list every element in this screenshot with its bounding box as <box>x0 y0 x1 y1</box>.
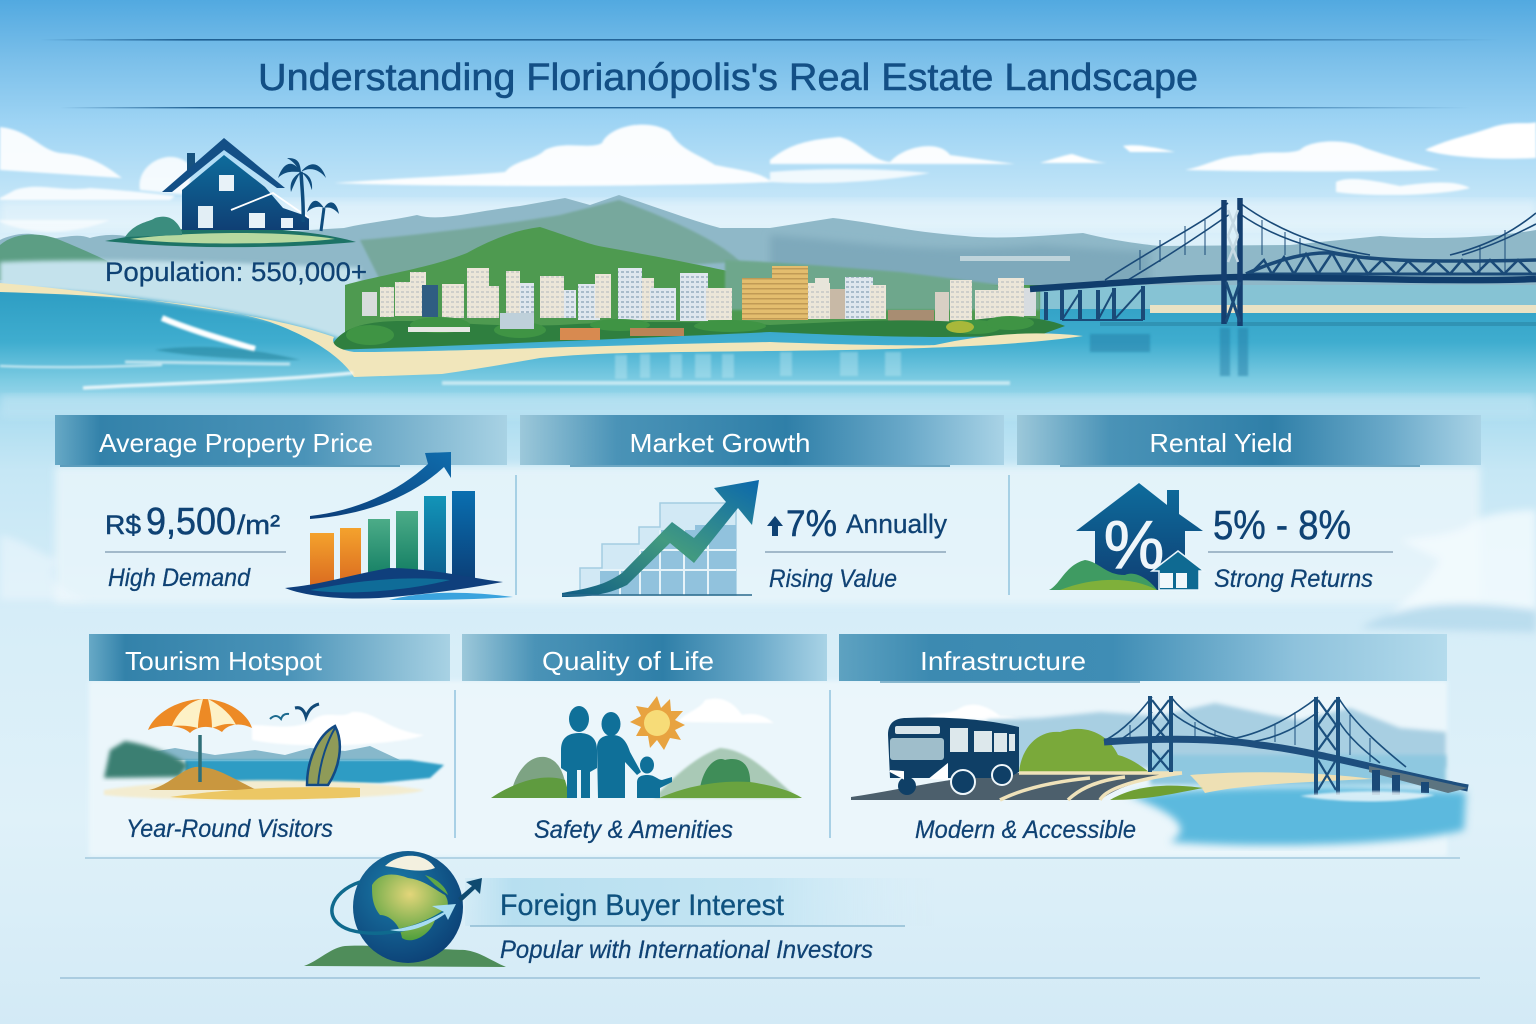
clouds: side <box>0 510 1536 632</box>
panel: average property price: High Demand <box>108 564 251 592</box>
panel: infrastructure <box>839 634 1468 845</box>
panel: foreign buyer interest: Foreign Buyer Interest <box>500 889 785 922</box>
clouds <box>0 122 1536 232</box>
horizon haze <box>0 200 1536 230</box>
panel: metrics background <box>55 466 1480 604</box>
value <box>105 501 280 543</box>
panel: foreign buyer interest <box>304 851 935 967</box>
heading <box>1017 415 1481 467</box>
panel: tourism hotspot <box>89 634 450 843</box>
value <box>767 503 947 544</box>
icon: globe <box>304 851 506 967</box>
heading <box>839 634 1447 683</box>
value: R$ <box>105 510 141 540</box>
panel: average property price <box>55 415 513 600</box>
illustration: bus, road and bridge <box>851 696 1468 845</box>
haze <box>0 395 1536 419</box>
value: 7% <box>786 503 837 544</box>
green hills <box>345 227 1040 340</box>
panel: rental yield <box>1017 415 1481 593</box>
buildings <box>362 266 1036 326</box>
value: /m² <box>237 510 280 540</box>
reflections <box>615 328 1248 379</box>
dividers <box>455 475 1009 838</box>
heading <box>520 415 1004 467</box>
beach <box>0 283 1083 377</box>
panel: tourism hotspot: Year-Round Visitors <box>126 815 333 843</box>
panel: market growth: Rising Value <box>769 565 897 593</box>
panel: quality of life: Safety & Amenities <box>534 816 733 844</box>
value: 5% - 8% <box>1213 502 1351 548</box>
value: 9,500 <box>146 501 236 543</box>
heading <box>55 415 507 467</box>
heading: Quality of Life <box>542 646 714 676</box>
chart: rising arrow <box>562 480 759 597</box>
heading <box>89 634 450 681</box>
heading: Rental Yield <box>1150 428 1292 458</box>
icon: beach scene <box>104 699 444 800</box>
panel: rental yield: Strong Returns <box>1214 565 1373 593</box>
heading: Average Property Price <box>99 428 373 458</box>
bridge <box>1030 198 1536 326</box>
population label: Population: 550,000+ <box>105 257 367 287</box>
panel: market growth <box>520 415 1004 597</box>
panel: row two background <box>89 681 1447 856</box>
panel: quality of life <box>462 634 827 844</box>
panel: foreign buyer interest: Popular with International Investors <box>500 936 873 964</box>
waves <box>0 318 1010 388</box>
value: Annually <box>846 509 947 539</box>
bar chart <box>285 452 513 600</box>
icon: family with sun <box>491 696 802 798</box>
hazy land behind strand <box>0 260 360 345</box>
heading <box>462 634 827 681</box>
heading: Tourism Hotspot <box>125 646 323 676</box>
icon: house with palms <box>105 138 356 247</box>
shore vegetation <box>330 316 1065 350</box>
panel: infrastructure: Modern & Accessible <box>915 816 1136 844</box>
icon: percent house: % <box>1104 507 1164 583</box>
banner <box>465 878 935 926</box>
mountains <box>0 195 1536 300</box>
heading: Infrastructure <box>920 646 1086 676</box>
sea <box>0 286 1536 411</box>
panel: city panorama <box>0 122 1536 419</box>
icon: percent house <box>1049 483 1204 590</box>
title: Understanding Florianópolis's Real Estate Landscape <box>258 57 1198 99</box>
heading: Market Growth <box>630 428 810 458</box>
